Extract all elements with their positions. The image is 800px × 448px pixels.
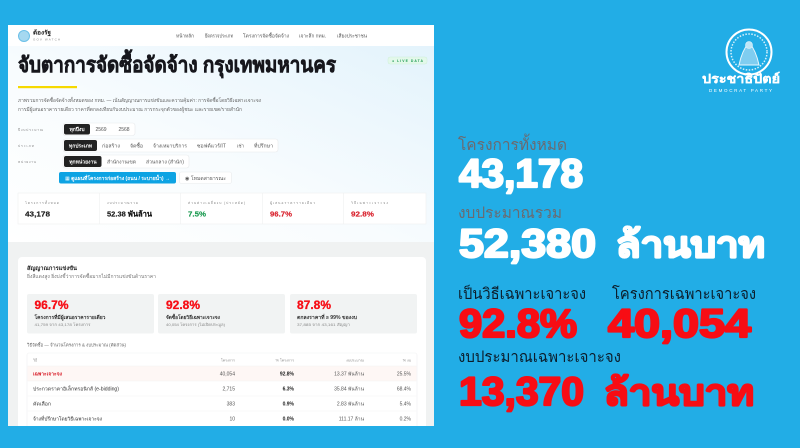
- button: construction map: ▦ ดูแผนที่โครงการก่อสร้าง (ถนน / ระบายน้ำ) →: [65, 173, 170, 183]
- row: consultant: [33, 415, 411, 420]
- icon: Democrat Party emblem: [726, 30, 772, 74]
- table header: % โครงการ: [276, 358, 294, 362]
- filter: fiscal year: 2568: [118, 127, 130, 133]
- stat: total projects value: 43,178: [459, 152, 583, 196]
- stat: specific budget value: [459, 370, 754, 414]
- row: e-bidding: ประกวดราคาอิเล็กทรอนิกส์ (e-bidding): [33, 384, 119, 392]
- row: e-bidding: 35.84 พันล้าน: [334, 386, 365, 392]
- stats row: [18, 193, 426, 224]
- filter: category: จัดซื้อ: [130, 140, 143, 150]
- table caption: วิธีจัดซื้อ — จำนวนโครงการ & งบประมาณ (คัดส่วน): [27, 342, 126, 348]
- filter: category: เช่า: [237, 144, 244, 150]
- live data badge: ● LIVE DATA: [392, 59, 424, 63]
- stat: total budget: [107, 202, 152, 217]
- filter: category: [18, 139, 278, 152]
- row: selection: 0.9%: [283, 402, 295, 408]
- stat: specific budget value: ล้านบาท: [604, 372, 754, 413]
- stat: total budget value: [459, 222, 765, 266]
- table header: โครงการ: [221, 358, 235, 362]
- filter: agency: ส่วนกลาง (สำนัก): [146, 160, 184, 166]
- intro paragraph: การมีผู้เสนอราคารายเดียว ราคาที่ตกลงเทียบกับงบประมาณ การกระจุกตัวของผู้ชนะ และรายเขต/รายสำนัก: [18, 106, 242, 113]
- row: specific method: 40,054: [220, 372, 235, 378]
- filter: category: ก่อสร้าง: [102, 142, 121, 150]
- table header: วิธี: [33, 358, 37, 362]
- filter: category: ทุกประเภท: [69, 142, 93, 150]
- stat: total budget value: ล้านบาท: [616, 224, 765, 265]
- signal: specific method: [158, 294, 285, 334]
- stat: specific method: [351, 201, 388, 217]
- row: selection: คัดเลือก: [33, 400, 51, 408]
- signal: single bidder: 96.7%: [34, 298, 69, 312]
- card heading: ยิ่งสีแดงสูง ยิ่งบ่งชี้ว่าการจัดซื้อมากไม่มีการแข่งขันด้านราคา: [27, 271, 156, 280]
- stat: specific method: 92.8%: [351, 210, 374, 218]
- navigation bar: [8, 25, 434, 46]
- party name: DEMOCRAT PARTY: [709, 88, 772, 93]
- row: consultant: จ้างที่ปรึกษาโดยวิธีเฉพาะเจาะจง: [33, 416, 103, 422]
- stat: average savings: 7.5%: [188, 210, 206, 218]
- site name: GOV WATCH: [33, 38, 60, 42]
- navigation links: เสียงประชาชน: [337, 32, 368, 40]
- party name: ประชาธิปัตย์: [702, 71, 780, 86]
- card heading: [27, 265, 156, 280]
- row: specific method: 92.8%: [280, 372, 295, 378]
- filter: fiscal year: ปีงบประมาณ: [18, 127, 44, 132]
- stat: single bidder: [270, 201, 315, 217]
- page title: จับตาการจัดซื้อจัดจ้าง กรุงเทพมหานคร: [18, 49, 337, 79]
- navigation links: เจาะลึก กทม.: [299, 32, 326, 40]
- stat: specific method: วิธีเฉพาะเจาะจง: [351, 200, 388, 205]
- site name: ต้องรัฐ: [33, 28, 52, 36]
- row: e-bidding: 68.4%: [397, 386, 412, 392]
- stat: total budget label: งบประมาณรวม: [458, 205, 562, 222]
- navigation links: [176, 32, 367, 38]
- stat: single bidder: ผู้เสนอราคารายเดียว: [270, 200, 315, 205]
- signal: single bidder: [27, 294, 154, 334]
- table header: % งบ: [403, 358, 412, 362]
- row: e-bidding: [33, 385, 411, 392]
- filter: category: ประเภท: [18, 144, 35, 148]
- row: selection: 2.83 พันล้าน: [337, 400, 365, 408]
- signal: price at budget: [290, 294, 417, 334]
- filter: fiscal year: ทุกปีงบ: [69, 126, 85, 133]
- signal: specific method: 40,054 โครงการ (ไม่เปิดประมูล): [166, 322, 226, 328]
- filter: category: ที่ปรึกษา: [254, 142, 273, 150]
- stat: specific budget value: 13,370: [459, 370, 584, 414]
- row: specific method: [28, 366, 416, 381]
- table: procurement methods: [27, 353, 417, 433]
- site name: [33, 29, 60, 40]
- stat: total projects: [25, 200, 59, 218]
- stat: specific budget label: งบประมาณเฉพาะเจาะจง: [458, 349, 621, 366]
- panel: competition signals card: [18, 257, 426, 433]
- signal: price at budget: 87.8%: [297, 298, 331, 312]
- stat: total budget: 52.38 พันล้าน: [107, 210, 153, 218]
- filter: category: ซอฟต์แวร์/IT: [197, 142, 226, 150]
- signal: single bidder: โครงการที่มีผู้เสนอราคารายเดียว: [34, 313, 106, 322]
- row: consultant: 0.0%: [283, 416, 295, 422]
- navigation links: ยึดตรวจประเภท: [205, 32, 233, 40]
- button: construction map: [59, 172, 176, 184]
- row: specific method: 25.5%: [397, 372, 412, 378]
- party name: [702, 71, 780, 93]
- filter: fiscal year: 2569: [95, 127, 107, 133]
- row: selection: [33, 401, 411, 406]
- icon: site logo: [18, 30, 30, 42]
- filter: category: จ้างเหมาบริการ: [153, 142, 187, 150]
- filter: agency: สำนักงานเขต: [107, 160, 136, 166]
- signal: price at budget: 37,885 จาก 43,161 สัญญา: [297, 322, 350, 327]
- stat: average savings: [188, 200, 245, 217]
- row: selection: 383: [227, 402, 235, 408]
- stat: specific projects value: 40,054: [608, 302, 752, 346]
- row: selection: 5.4%: [400, 402, 412, 408]
- stat: total projects label: โครงการทั้งหมด: [458, 133, 567, 154]
- filter: fiscal year: [18, 123, 135, 136]
- button: transparency mode: [180, 172, 232, 184]
- row: consultant: 10: [229, 416, 235, 422]
- stat: specific method share label: เป็นวิธีเฉพาะเจาะจง: [458, 284, 586, 303]
- live data badge: [388, 57, 427, 64]
- signal: specific method: จัดซื้อโดยวิธีเฉพาะเจาะจง: [166, 312, 221, 321]
- row: specific method: 13.37 พันล้าน: [334, 370, 365, 378]
- filter: agency: ทุกหน่วยงาน: [69, 158, 97, 166]
- stat: single bidder: 96.7%: [270, 210, 292, 218]
- title accent bar: [18, 86, 77, 88]
- signal: single bidder: 41,759 จาก 43,178 โครงการ: [34, 322, 91, 327]
- panel: website screenshot: [8, 25, 434, 433]
- button: transparency mode: ◉ โหมดสาธารณะ: [185, 175, 226, 182]
- filter: agency: [18, 155, 189, 168]
- stat: total budget: งบประมาณรวม: [107, 201, 138, 205]
- signal: specific method: 92.8%: [166, 298, 200, 312]
- row: consultant: 111.17 ล้าน: [339, 416, 365, 422]
- row: specific method: เฉพาะเจาะจง: [33, 372, 63, 378]
- navigation links: หน้าหลัก: [176, 32, 194, 40]
- table header: [33, 358, 411, 362]
- row: consultant: 0.2%: [400, 416, 412, 422]
- card heading: สัญญาณการแข่งขัน: [27, 265, 77, 272]
- row: e-bidding: 6.3%: [283, 386, 295, 392]
- intro paragraph: ภาพรวมการจัดซื้อจัดจ้างทั้งหมดของ กทม. — เน้นสัญญาณการแข่งขันและความคุ้มค่า: การจัดซื้อโดยวิธีเฉพาะเจาะจง: [18, 95, 262, 104]
- stat: specific method share value: 92.8%: [459, 302, 577, 346]
- intro paragraph: [18, 96, 261, 112]
- signal: price at budget: ตกลงราคาที่ ≥ 99% ของงบ: [297, 313, 357, 321]
- row: e-bidding: 2,715: [222, 386, 235, 392]
- table header: งบประมาณ: [346, 358, 365, 362]
- navigation links: โครงการจัดซื้อจัดจ้าง: [243, 30, 290, 40]
- stat: total projects: 43,178: [25, 210, 50, 218]
- stat: average savings: ส่วนต่างเฉลี่ยงบ (ประหยัด): [188, 200, 245, 205]
- filter: agency: หน่วยงาน: [18, 160, 37, 164]
- stat: specific projects label: โครงการเฉพาะเจาะจง: [612, 285, 756, 303]
- stat: total budget value: 52,380: [459, 222, 596, 266]
- stat: total projects: โครงการทั้งหมด: [25, 200, 59, 205]
